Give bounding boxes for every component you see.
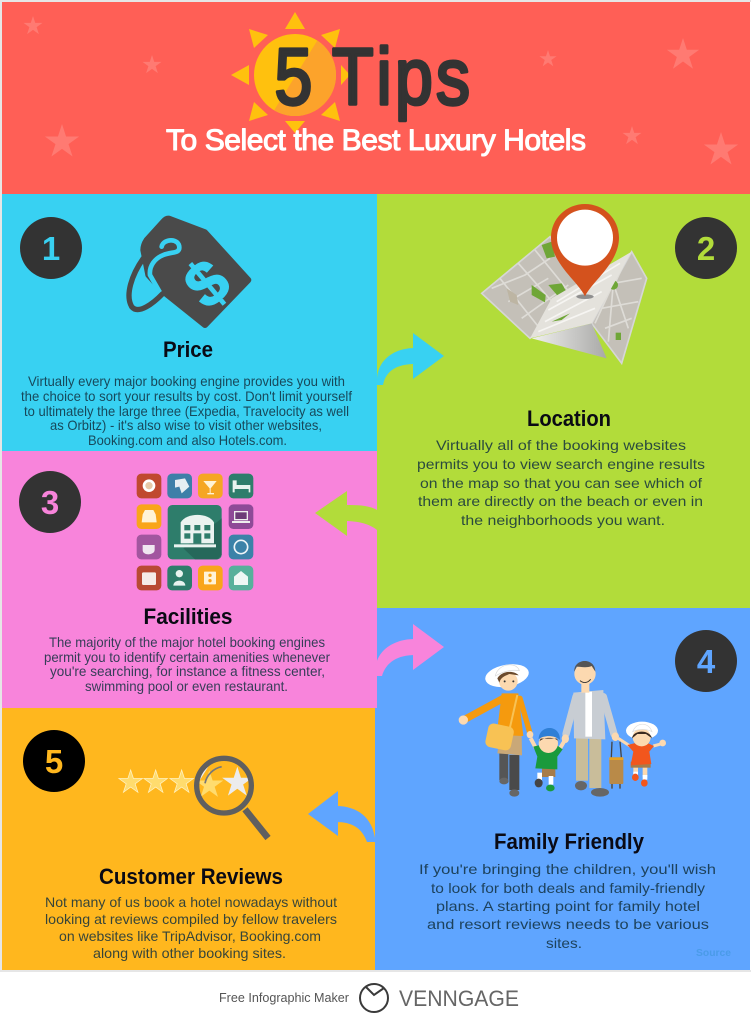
number badge 5: 5 [45,743,63,780]
text: family body: to look for both deals and family-friendly [431,880,705,896]
text: reviews body: on websites like TripAdvisor, Booking.com [59,928,321,944]
number badge 3 [19,471,81,533]
footer tagline: Free Infographic Maker [219,991,349,1005]
panel: tip 2 location [377,194,750,608]
text: family body [419,861,716,951]
text: family body: and resort reviews needs to be various [427,916,709,932]
number badge 4 [675,630,737,692]
text: location body: them are directly on the beach or even in [418,493,703,509]
panel: tip 4 family friendly [375,608,750,970]
panel: header [2,2,750,194]
father [562,661,619,797]
subtitle: To Select the Best Luxury Hotels [166,124,586,157]
heading: facilities: Facilities [144,604,232,629]
text: reviews body: Not many of us book a hotel nowadays without [45,894,337,910]
venngage wordmark: VENNGAGE [399,986,519,1011]
icon: map with pin [482,204,647,363]
background stars [23,16,738,165]
footer branding [219,984,519,1012]
text: location body: the neighborhoods you want. [461,512,665,528]
text: price body [21,373,352,448]
text: reviews body: along with other booking sites. [93,945,286,961]
text: price body: the choice to sort your results by cost. Don't limit yourself [21,388,352,404]
number badge 2: 2 [697,230,715,267]
text: price body: Virtually every major booking engine provides you with [28,373,345,389]
title: Tips [332,32,470,121]
panel: tip 1 price [2,194,377,451]
number badge 5 [23,730,85,792]
text: facilities body [44,634,330,694]
source link: Source [696,947,731,959]
arrow: location to facilities [315,491,377,536]
text: family body: sites. [546,935,582,951]
text: facilities body: The majority of the major hotel booking engines [49,634,325,650]
panel: tip 3 facilities [2,451,377,708]
text: reviews body: looking at reviews compiled by fellow travelers [45,911,337,927]
text: facilities body: permit you to identify certain amenities whenever [44,649,330,665]
number badge 2 [675,217,737,279]
icon: stars and magnifier [119,758,268,838]
number badge 4: 4 [697,643,716,680]
text: location body [417,437,705,528]
boy [531,728,565,791]
icon: sun [231,12,350,133]
suitcase [609,742,623,789]
heading: price: Price [163,337,213,362]
number badge 1: 1 [42,230,60,267]
text: location body: on the map so that you can see which of [420,475,702,491]
number badge 1 [20,217,82,279]
arrow: price to location [377,333,444,385]
text: family body: If you're bringing the children, you'll wish [419,861,716,877]
text: price body: as Orbitz) - it's also wise to visit other websites, [50,417,322,433]
icon: hotel amenities grid [137,474,253,590]
title: 5 [275,32,312,121]
text: family body: plans. A starting point for family hotel [436,898,700,914]
girl [618,722,666,787]
text: facilities body: you're searching, for instance a fitness center, [50,663,325,679]
icon: family [459,661,666,797]
number badge 3: 3 [41,484,59,521]
heading: family friendly: Family Friendly [494,829,645,854]
icon: venngage logo [360,984,388,1012]
text: facilities body: swimming pool or even restaurant. [85,678,288,694]
arrow: facilities to family [375,624,444,676]
heading: customer reviews: Customer Reviews [99,864,283,889]
text: price body: Booking.com and also Hotels.com. [88,432,287,448]
heading: location: Location [527,406,611,431]
text: location body: Virtually all of the booking websites [436,437,686,453]
icon: price tag: $ [171,246,243,322]
arrow: family to reviews [308,791,375,842]
text: location body: permits you to view search engine results [417,456,705,472]
mother [459,661,533,797]
text: reviews body [45,894,337,961]
text: price body: to ultimately the large three (Expedia, Travelocity as well [24,403,349,419]
icon: price tag [129,219,248,325]
panel: tip 5 customer reviews [2,708,375,970]
